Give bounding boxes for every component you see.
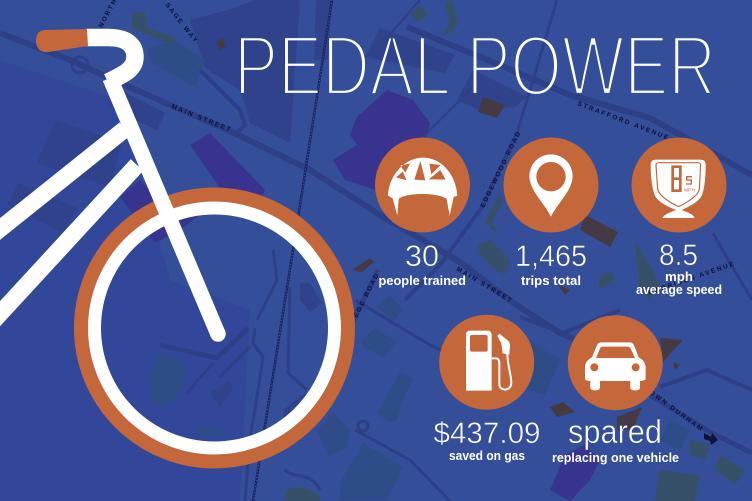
map street labels: EGE ROAD [353, 271, 381, 319]
icon: gas pump [439, 315, 534, 410]
value: $437.09 [434, 417, 540, 450]
stat: saved on gas [434, 315, 540, 463]
map street labels: SAGE WAY [163, 2, 200, 45]
label: replacing one vehicle [552, 451, 679, 465]
map street labels [98, 0, 737, 434]
map street labels: MAIN STREET [455, 266, 514, 305]
icon: direction arrow [704, 433, 718, 445]
label: people trained [378, 274, 466, 288]
map street labels: STRAFFORD AVENUE [576, 100, 671, 142]
bicycle illustration [0, 29, 348, 462]
label: saved on gas [449, 449, 525, 463]
label: average speed [636, 283, 722, 297]
label: trips total [521, 274, 581, 288]
stat: average speed [632, 138, 726, 297]
handlebar [86, 38, 135, 82]
map street labels: GARRISON AVENUE [648, 260, 737, 297]
icon: speedometer [632, 138, 726, 232]
map street labels: EDGEWOOD ROAD [480, 129, 523, 209]
down tube [0, 165, 137, 324]
stat: vehicle spared [552, 315, 679, 465]
icon: speedometer: MPH [684, 187, 695, 193]
wheel rim [94, 208, 334, 448]
value: 30 [405, 240, 439, 273]
icon: car [568, 315, 663, 410]
railway line [253, 0, 332, 501]
stat: trips total [504, 138, 598, 288]
stat: people trained [375, 138, 470, 288]
map street labels: DOWNTOWN DURHAM [620, 369, 705, 434]
value: 1,465 [515, 240, 587, 273]
icon: helmet [375, 138, 470, 232]
top tube [0, 129, 125, 237]
fork [110, 78, 226, 342]
wheel tire [81, 194, 348, 462]
handlebar grip [36, 29, 88, 52]
value: spared [568, 413, 662, 450]
value: 8.5 [659, 239, 698, 272]
map street labels: MAIN STREET [170, 103, 233, 134]
label: mph [665, 270, 693, 284]
icon: map pin [504, 138, 598, 232]
